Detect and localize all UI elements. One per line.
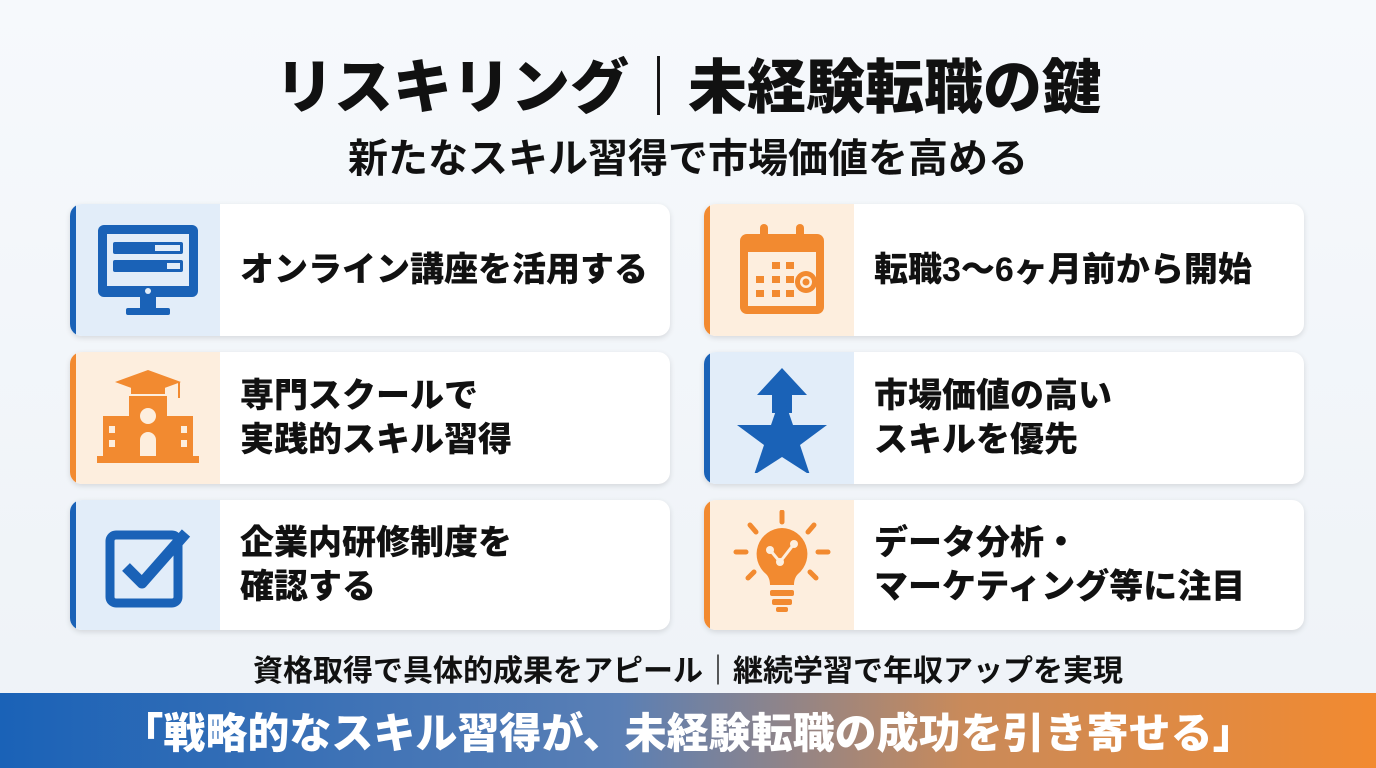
text — [240, 524, 512, 606]
icon: star arrow — [704, 352, 854, 484]
card: high value skills — [704, 352, 1304, 484]
text: 企業内研修制度を — [240, 524, 512, 562]
card: start timing — [704, 204, 1304, 336]
icon: calendar — [704, 204, 854, 336]
banner: 「戦略的なスキル習得が、未経験転職の成功を引き寄せる」 — [121, 710, 1255, 757]
card: specialty school — [70, 352, 670, 484]
text: 実践的スキル習得 — [240, 421, 512, 459]
text: 専門スクールで — [240, 377, 478, 415]
text: マーケティング等に注目 — [874, 568, 1245, 606]
text — [874, 377, 1112, 459]
footer note: 資格取得で具体的成果をアピール｜継続学習で年収アップを実現 — [253, 655, 1123, 688]
text — [240, 377, 512, 459]
text: オンライン講座を活用する — [240, 251, 648, 289]
subtitle: 新たなスキル習得で市場価値を高める — [348, 137, 1028, 181]
text — [874, 524, 1245, 606]
text: 市場価値の高い — [874, 377, 1112, 415]
icon: monitor — [70, 204, 220, 336]
icon: checkbox — [70, 500, 220, 630]
text: 確認する — [240, 568, 376, 606]
icon: school — [70, 352, 220, 484]
card: online courses — [70, 204, 670, 336]
card: company training — [70, 500, 670, 630]
text: データ分析・ — [874, 524, 1078, 562]
text: 転職3〜6ヶ月前から開始 — [874, 251, 1252, 289]
banner — [0, 693, 1376, 768]
title: リスキリング｜未経験転職の鍵 — [275, 55, 1101, 121]
card: data analysis — [704, 500, 1304, 630]
icon: bulb — [704, 500, 854, 630]
text: スキルを優先 — [874, 421, 1078, 459]
